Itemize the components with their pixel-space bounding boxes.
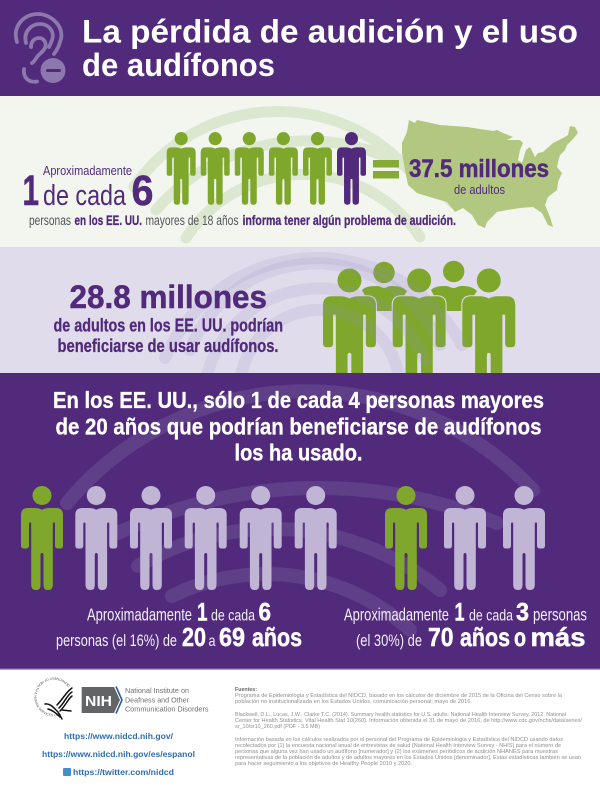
callout: 1 de cada 6 [22,163,154,215]
sources: Fuentes: [235,687,257,693]
sources [235,687,582,767]
header band [0,0,600,96]
caption: 20 to 69: a [208,633,216,650]
links: https://www.nidcd.nih.gov/ [64,731,174,741]
sources: representativas de la población de adultos y de adultos mayores en los Estados Unidos [denominador]. Estas estadísticas también se usan [235,755,581,761]
callout: 1 de cada 6: 1 [22,167,39,215]
caption: 20 to 69: 69 [219,622,245,652]
institute name: National Institute on [125,686,189,695]
pictogram: 5 green people and 1 purple person [167,132,366,205]
equals sign [373,160,399,178]
callout: 1 de cada 6: de cada [43,180,127,212]
institute name [125,686,209,714]
links: https://twitter.com/nidcd [73,767,174,777]
caption sentence: personas [29,213,71,228]
caption: 20 to 69: años [252,622,302,652]
caption: 70 and over: Aproximadamente [344,604,449,624]
sources: población no institucionalizada en los Estados Unidos, comunicación personal; mayo de 2016. [235,699,472,705]
title: de audífonos [82,47,275,83]
caption: 70 and over [344,598,587,652]
caption: 70 and over: 1 [454,598,465,626]
panel: 1 de cada 6 [0,96,600,247]
statistic: 37.5 millones de adultos: 37.5 millones [409,155,549,183]
panel: 1 de cada 4 [0,373,600,670]
panel: 28.8 millones [0,247,600,373]
statistic text: de adultos en los EE. UU. podrían [54,316,283,336]
statistic text [54,279,283,356]
title [82,14,578,83]
caption: 20 to 69: 6 [258,598,271,626]
institute name: Deafness and Other [125,696,189,704]
sources: Información basada en los cálculos realizados por el personal del Programa de Epidemiología y Estadística del NIDCD usando datos [235,737,563,743]
pictogram: 1 of 6 people aged 20 to 69 [21,486,337,590]
logo: HHS seal: DEPARTMENT OF HEALTH & HUMAN SERVICES USA [34,677,70,716]
sources: sr_10/sr10_260.pdf (PDF - 3.5 MB) [235,724,320,730]
links [42,731,195,777]
caption: 70 and over: (el 30%) de [356,631,422,650]
caption sentence: en los EE. UU. [74,213,142,228]
pictogram: 1 of 3 people aged 70 and over [385,486,545,590]
title: La pérdida de audición y el uso [82,14,578,50]
caption: 70 and over: de cada [469,608,513,624]
caption sentence [29,213,456,228]
caption: 70 and over: más [530,622,586,652]
heading [53,387,544,466]
sources: para hacer seguimiento a los objetivos de Healthy People 2010 y 2020. [235,761,412,767]
callout: 1 de cada 6: Aproximadamente [43,163,132,178]
institute name: Communication Disorders [125,705,209,714]
sources: Blackwell, D.L., Lucas, J.W., Clarke T.C. (2014). Summary health statistics for U.S. adults: National Health Interview Survey, 2012. National [235,712,566,718]
statistic text: 28.8 millones [70,279,267,315]
heading: En los EE. UU., sólo 1 de cada 4 personas mayores [53,387,544,413]
links: https://www.nidcd.nih.gov/es/espanol [42,749,195,759]
caption: 70 and over: años [460,622,510,652]
caption: 20 to 69: personas (el 16%) de [56,631,177,650]
pictogram: group of five people [323,260,516,373]
statistic: 37.5 millones de adultos [409,155,549,197]
caption: 20 to 69 [56,598,302,652]
caption sentence: informa tener algún problema de audición. [242,213,456,228]
caption: 20 to 69: 20 [182,622,206,652]
statistic: 37.5 millones de adultos: de adultos [454,182,505,197]
caption: 20 to 69: de cada [211,608,255,624]
sources: Center for Health Statistics. Vital Health Stat 10(260). Información obtenida el 31 de mayo de 2016, de http://www.cdc.gov/nchs/data/series/ [235,718,582,724]
heading: de 20 años que podrían beneficiarse de audífonos [56,414,542,440]
caption: 70 and over: 70 [428,622,454,652]
caption sentence: mayores de 18 años [146,213,239,228]
caption: 70 and over: 3 [516,598,529,626]
sources: personas que alguna vez han usado un audífono [numerador] y (2) los exámenes periódicos de audición NHANES para muestras [235,749,558,755]
caption: 20 to 69: 1 [197,598,208,626]
statistic text: beneficiarse de usar audífonos. [58,336,278,356]
heading: los ha usado. [234,440,362,466]
logo: NIH: NIH [85,693,112,710]
sources: recolectados por (1) la encuesta nacional anual de entrevistas de salud (National Health Interview Survey - NHIS) para el número de [235,743,561,749]
footer [34,677,582,777]
sources: Programa de Epidemiología y Estadística del NIDCD, basado en los cálculos de diciembre de 2015 de la Oficina del Censo sobre la [235,693,563,699]
callout: 1 de cada 6: 6 [132,167,154,215]
icon: ear with minus sign [16,14,66,83]
caption: 20 to 69: Aproximadamente [87,604,192,624]
caption: 70 and over: o [514,622,526,652]
map of the United States [402,120,578,228]
logo: NIH [82,686,122,714]
